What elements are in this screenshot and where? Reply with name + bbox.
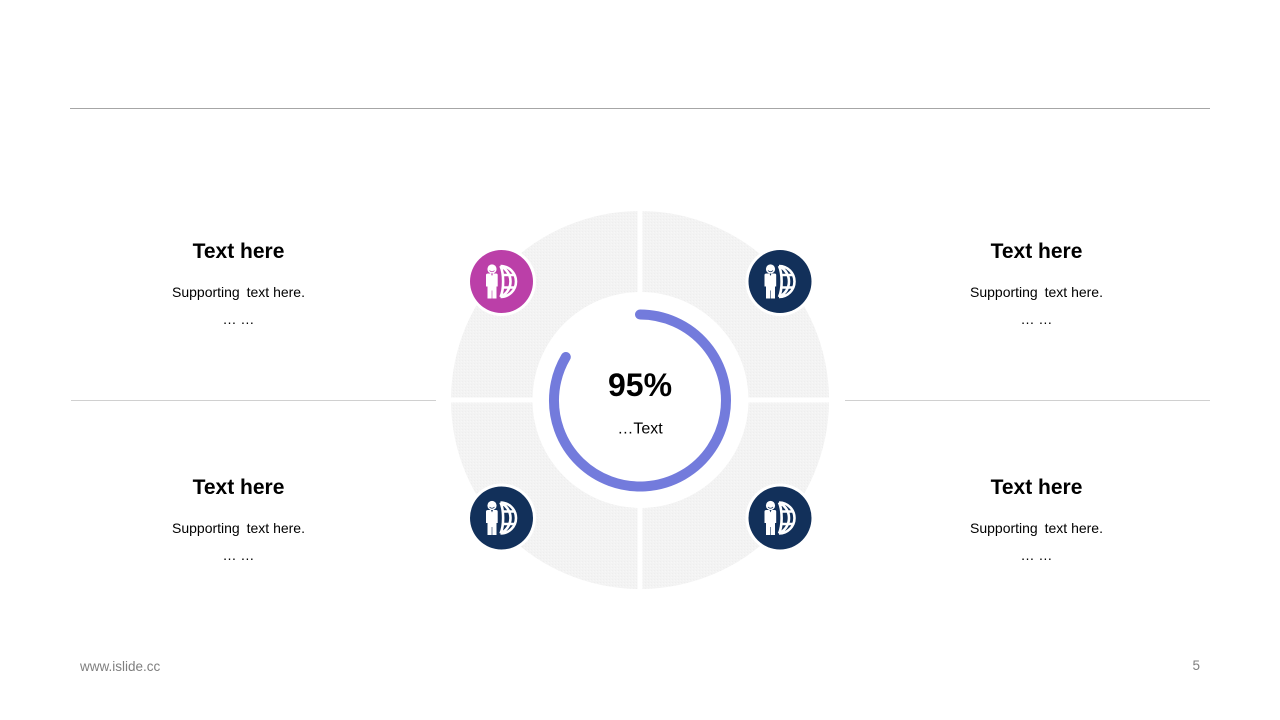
- progress ring: [554, 314, 726, 486]
- icon: person and globe, navy top right: [746, 247, 814, 316]
- heading: top right: Text here: [991, 240, 1082, 263]
- supporting text: bottom right: Supporting text here.: [970, 520, 1103, 536]
- right middle divider: [845, 400, 1210, 401]
- center value: 95%: [608, 367, 672, 403]
- left middle divider: [71, 400, 436, 401]
- quadrant: bottom left: [451, 402, 638, 589]
- ellipsis: top left: … …: [223, 311, 254, 327]
- center label: …Text: [617, 420, 663, 438]
- heading: bottom left: Text here: [193, 476, 284, 499]
- heading: top left: Text here: [193, 240, 284, 263]
- text block: bottom right: [970, 476, 1103, 563]
- ellipsis: bottom right: … …: [1021, 547, 1052, 563]
- quadrant: top right: [642, 211, 829, 398]
- icon: person and globe, navy bottom right: [746, 484, 814, 552]
- text block: bottom left: [172, 476, 305, 563]
- heading: bottom right: Text here: [991, 476, 1082, 499]
- text block: top right: [970, 240, 1103, 327]
- top divider line: [70, 108, 1210, 109]
- ellipsis: top right: … …: [1021, 311, 1052, 327]
- icon: person and globe, navy bottom left: [467, 484, 536, 552]
- footer website: www.islide.cc: [80, 659, 160, 674]
- quadrant: bottom right: [642, 402, 829, 589]
- supporting text: top left: Supporting text here.: [172, 284, 305, 300]
- supporting text: bottom left: Supporting text here.: [172, 520, 305, 536]
- inner white circle: [532, 292, 748, 508]
- text block: top left: [172, 240, 305, 327]
- page number: 5: [1192, 658, 1200, 673]
- icon: person and globe, magenta: [467, 247, 536, 316]
- ellipsis: bottom left: … …: [223, 547, 254, 563]
- quadrant: top left: [451, 211, 638, 398]
- supporting text: top right: Supporting text here.: [970, 284, 1103, 300]
